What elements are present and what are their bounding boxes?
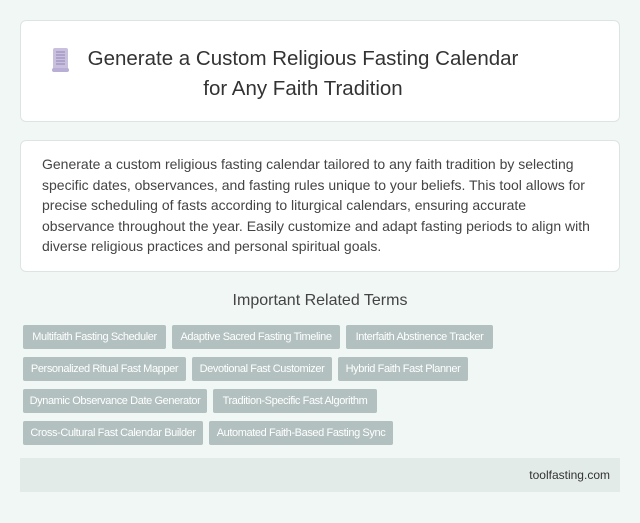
title	[88, 47, 518, 100]
tags: Devotional Fast Customizer	[200, 363, 324, 375]
description text: Generate a custom religious fasting calendar tailored to any faith tradition by selecting specific dates, observances, and fasting rules unique to your beliefs. This tool allows for precise scheduling of fasts according to liturgical calendars, ensuring accurate observance throughout the year. Easily customize and adapt fasting periods to align with diverse religious practices and personal spiritual goals.	[42, 156, 590, 254]
tags: Dynamic Observance Date Generator	[30, 395, 200, 407]
tags: Interfaith Abstinence Tracker	[356, 331, 483, 343]
title: for Any Faith Tradition	[203, 77, 403, 100]
icon: scroll	[52, 48, 69, 72]
tags: Multifaith Fasting Scheduler	[32, 331, 157, 343]
header card	[20, 20, 620, 122]
tags: Cross-Cultural Fast Calendar Builder	[30, 427, 196, 439]
heading: related terms: Important Related Terms	[233, 292, 407, 309]
title: Generate a Custom Religious Fasting Calendar	[88, 47, 518, 70]
footer	[20, 458, 620, 492]
tags: Automated Faith-Based Fasting Sync	[217, 427, 385, 439]
tags: Tradition-Specific Fast Algorithm	[223, 395, 367, 407]
footer text: toolfasting.com	[529, 468, 610, 482]
tags: Hybrid Faith Fast Planner	[346, 363, 460, 375]
description card	[20, 140, 620, 272]
tags: Personalized Ritual Fast Mapper	[31, 363, 178, 375]
tags: Adaptive Sacred Fasting Timeline	[180, 331, 332, 343]
